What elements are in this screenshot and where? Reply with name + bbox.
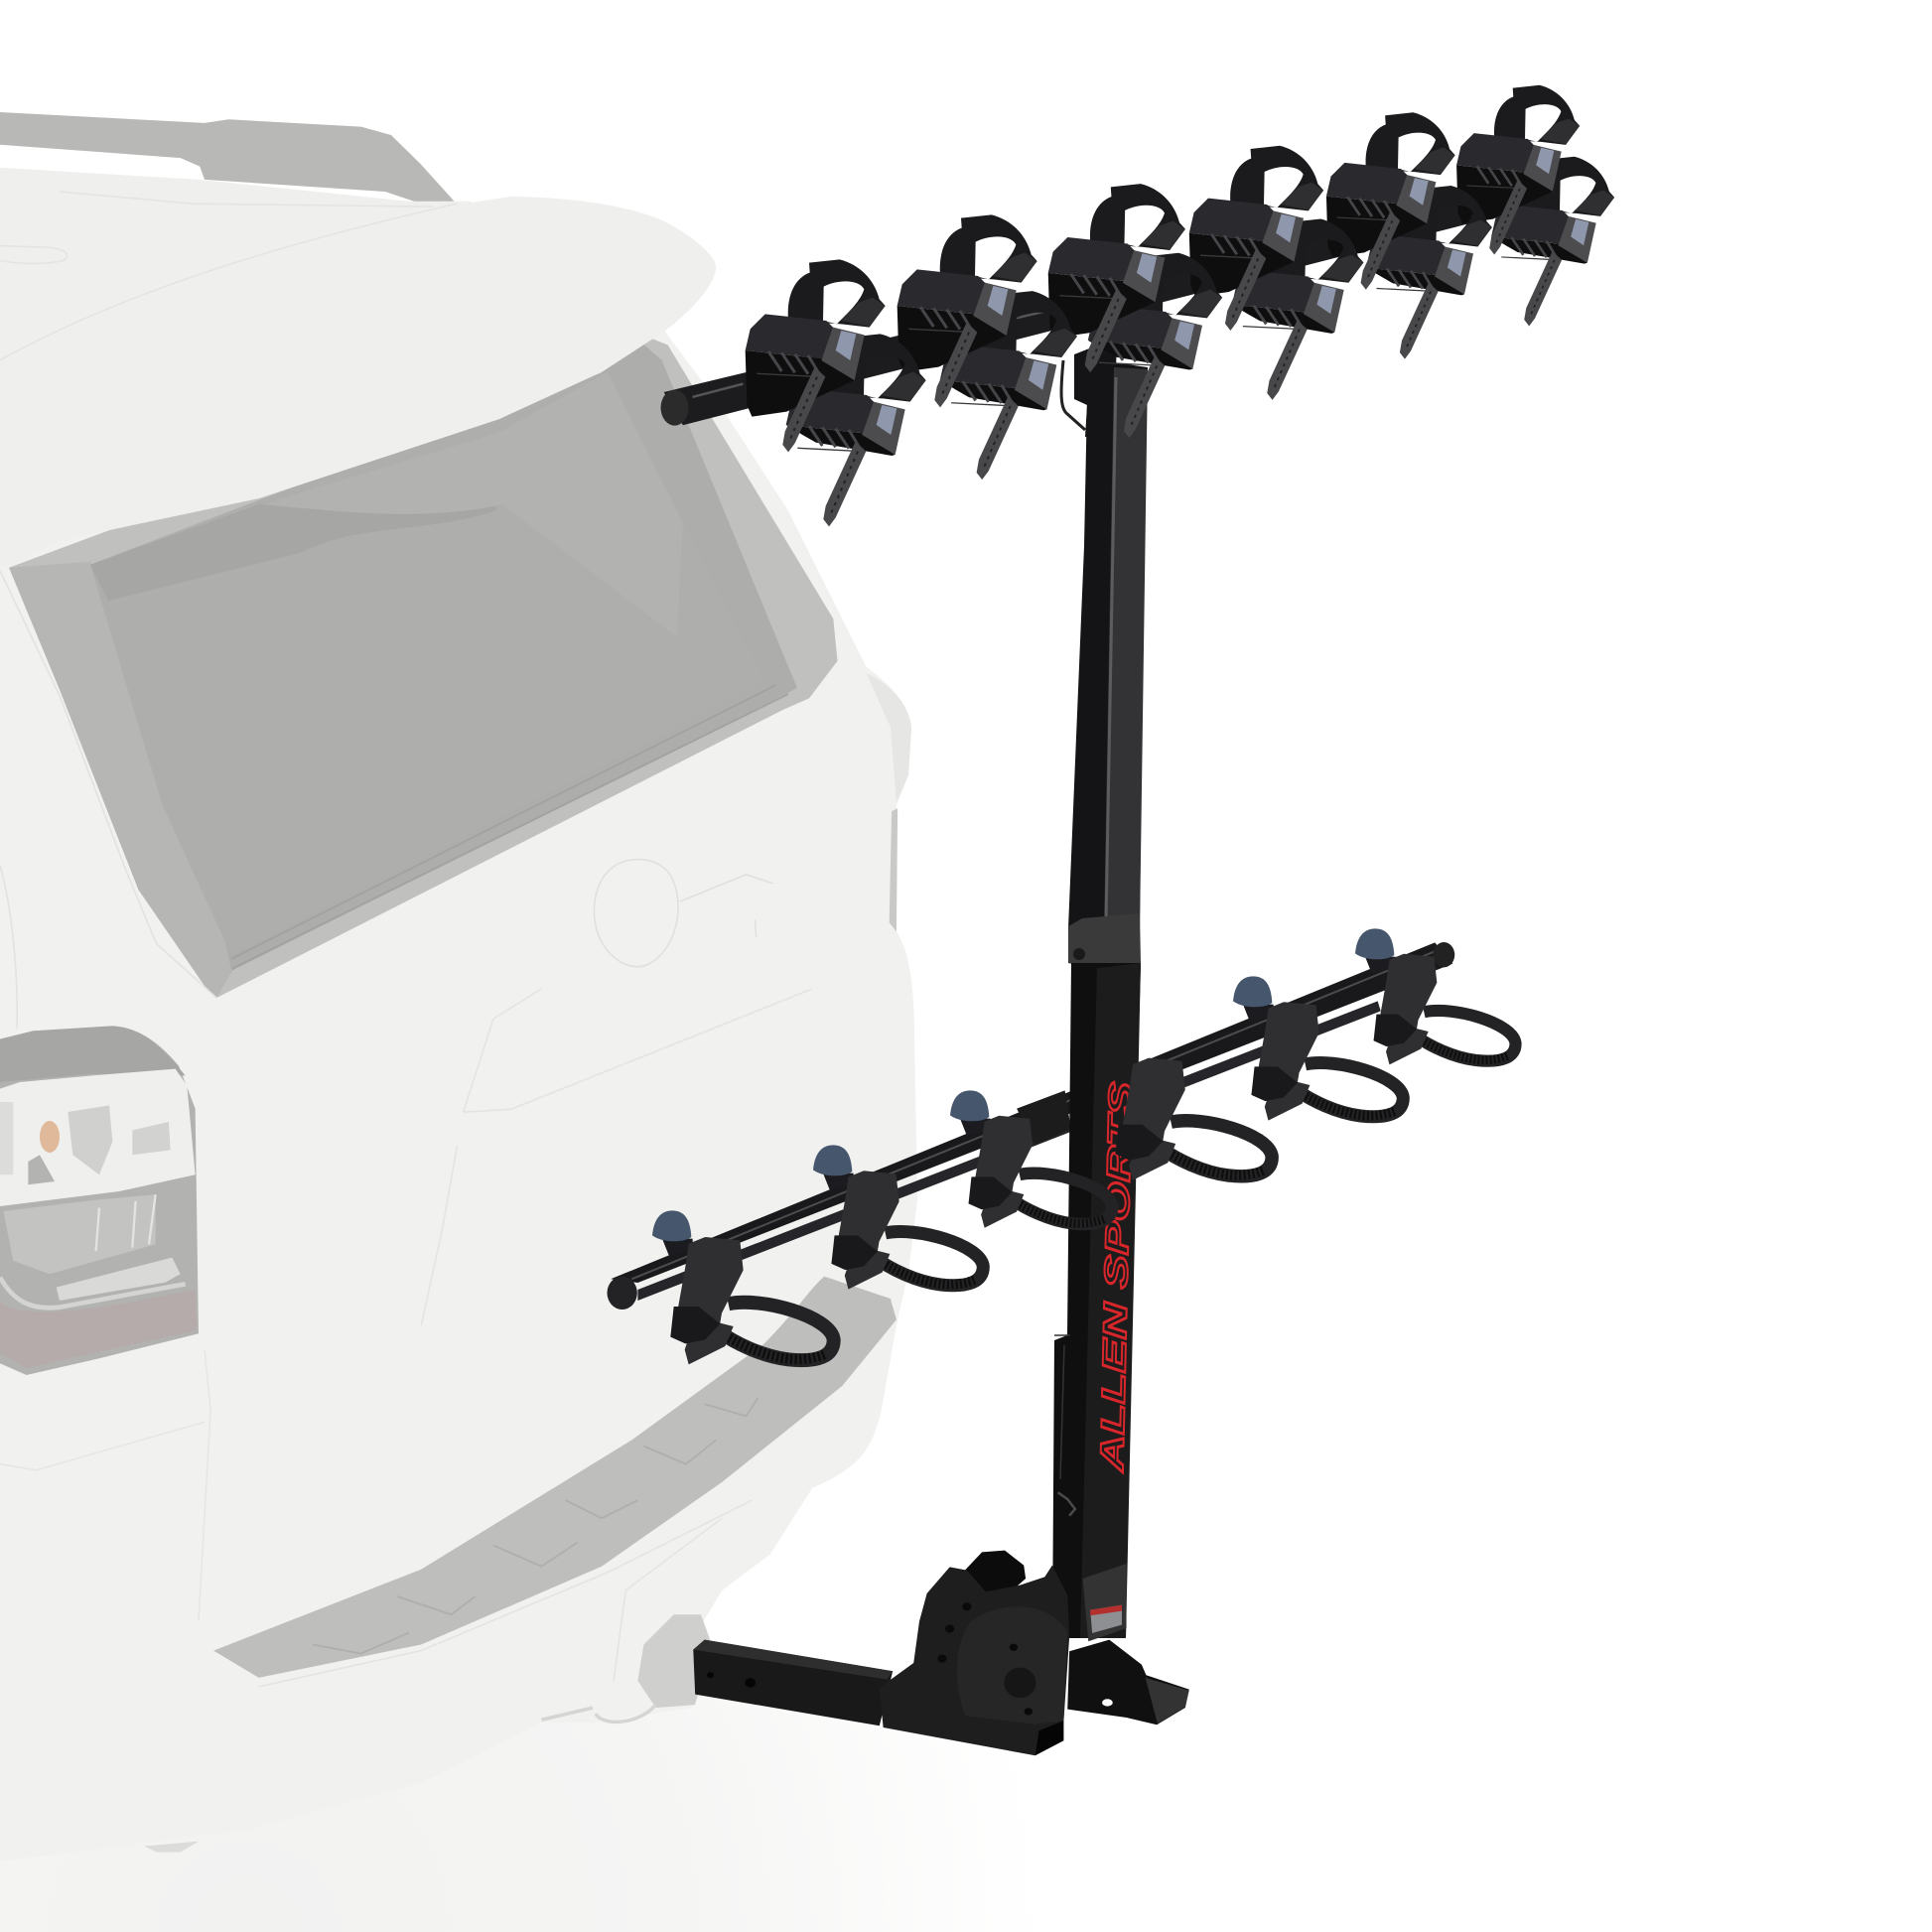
dark inset — [28, 1155, 55, 1184]
lower mast section — [1052, 963, 1141, 1638]
lower mast sleeve — [1083, 1564, 1127, 1641]
side strip — [890, 808, 897, 931]
chrome strip — [57, 1258, 181, 1301]
lens grid — [0, 1102, 13, 1174]
clamp pair 3 front — [1048, 184, 1185, 372]
housing — [0, 1026, 199, 1375]
left trim band — [9, 562, 237, 998]
plate slot holes — [962, 1602, 971, 1610]
strap station 4 — [1115, 1058, 1272, 1180]
strap station 1 — [670, 1237, 834, 1364]
bar end cap right — [1433, 942, 1454, 967]
amber lamp — [40, 1121, 60, 1153]
lower mast side face — [1080, 963, 1141, 1638]
strap station 2 — [831, 1171, 983, 1290]
spoiler — [0, 197, 716, 568]
bar highlight — [631, 951, 1435, 1279]
lower car parts — [0, 989, 897, 1853]
rear window glass — [90, 372, 764, 956]
brand logo on mast: ALLEN SPORTS — [1093, 1081, 1139, 1473]
rear step pad — [213, 1277, 897, 1678]
hitch tube top face — [693, 1640, 893, 1680]
hitch receiver — [637, 1614, 713, 1708]
knob station 2 — [813, 1145, 854, 1189]
plate recess — [421, 989, 812, 1325]
clamp pair 1 front — [746, 259, 886, 452]
clamp pair 2 rear — [940, 291, 1077, 480]
pivot socket — [1035, 1721, 1063, 1755]
clear lens — [0, 1069, 196, 1206]
knob station 5 — [1233, 976, 1274, 1021]
upper bar end cap — [661, 390, 689, 426]
tow ring — [541, 1705, 656, 1722]
mast coupling — [1017, 1090, 1071, 1145]
bumper crease — [259, 1500, 753, 1687]
upper bar highlight — [692, 310, 1053, 397]
pivot knob — [965, 1551, 1026, 1596]
foot pedal — [1146, 1678, 1189, 1724]
mast latch — [1058, 1492, 1075, 1516]
car body — [0, 327, 917, 1862]
reflector — [132, 1122, 171, 1155]
clamp pair 5 front — [1326, 112, 1455, 290]
upper mast section — [1068, 362, 1148, 928]
exhaust tip — [144, 1842, 199, 1853]
upper mast side face — [1104, 367, 1148, 928]
fuel emblem — [594, 860, 773, 967]
ground shadow — [0, 1688, 1092, 1932]
hitch pin holes — [745, 1678, 756, 1688]
upper cross bar — [661, 182, 1541, 426]
hitch tube — [693, 1640, 893, 1725]
pivot plate — [880, 1566, 1069, 1755]
clamp pair 4 rear — [1232, 219, 1363, 400]
collar bolt — [1073, 948, 1085, 960]
pivot bolt — [1004, 1668, 1035, 1698]
mast head bracket — [1074, 338, 1117, 437]
faded SUV rear — [0, 112, 917, 1862]
top band — [0, 1026, 186, 1082]
upright mast — [1052, 338, 1148, 1638]
warning label red — [1090, 1605, 1122, 1615]
clamp pair 3 rear — [1088, 253, 1222, 438]
strap station 5 — [1251, 1002, 1403, 1121]
clamp pair 2 front — [897, 214, 1037, 407]
wire hook — [1061, 360, 1085, 430]
bar second tube — [637, 1001, 1381, 1301]
lower bike straps — [652, 928, 1516, 1364]
red band — [0, 1289, 197, 1368]
taillight — [0, 1026, 199, 1375]
lower cross bar — [608, 942, 1454, 1310]
knob station 6 — [1355, 928, 1396, 973]
hitch base — [693, 1492, 1189, 1755]
plate disc — [957, 1606, 1067, 1725]
bulb housing — [68, 1105, 112, 1174]
roof — [0, 168, 662, 571]
bar main tube — [611, 942, 1452, 1283]
roof rail — [0, 112, 455, 204]
rear window trim — [9, 333, 838, 998]
upper bar tube — [664, 182, 1541, 425]
strap station 3 — [969, 1116, 1112, 1228]
lens streaks — [96, 1194, 156, 1251]
bar end cap left — [608, 1277, 637, 1310]
mast side notch — [1054, 1335, 1070, 1479]
wheel clamps — [746, 85, 1614, 526]
corner bumper line — [0, 1350, 210, 1620]
foot — [1067, 1640, 1189, 1725]
clamp pair 6 front — [1456, 85, 1580, 254]
foot hole — [1102, 1699, 1113, 1707]
clamp pair 6 rear — [1491, 157, 1614, 326]
step pad ridges — [313, 1398, 759, 1654]
side taillight pod — [867, 673, 911, 802]
strap station 6 — [1374, 954, 1516, 1064]
mast collar — [1068, 913, 1141, 970]
clamp pair 4 front — [1189, 146, 1323, 331]
right inner seal — [225, 339, 797, 971]
clamp pair 5 rear — [1366, 186, 1492, 359]
interior reflection — [90, 445, 496, 601]
lower lens shading — [3, 1194, 156, 1274]
knob station 3 — [950, 1090, 991, 1135]
warning label — [1090, 1605, 1122, 1633]
window lower seal — [231, 685, 788, 969]
roof details — [0, 192, 458, 360]
clamp pair 1 rear — [786, 334, 926, 526]
knob station 1 — [652, 1210, 693, 1255]
tailgate panel lines — [0, 571, 216, 1028]
mast highlight — [1106, 377, 1116, 923]
glass glare — [262, 372, 683, 636]
lower bright curve — [0, 1278, 186, 1308]
